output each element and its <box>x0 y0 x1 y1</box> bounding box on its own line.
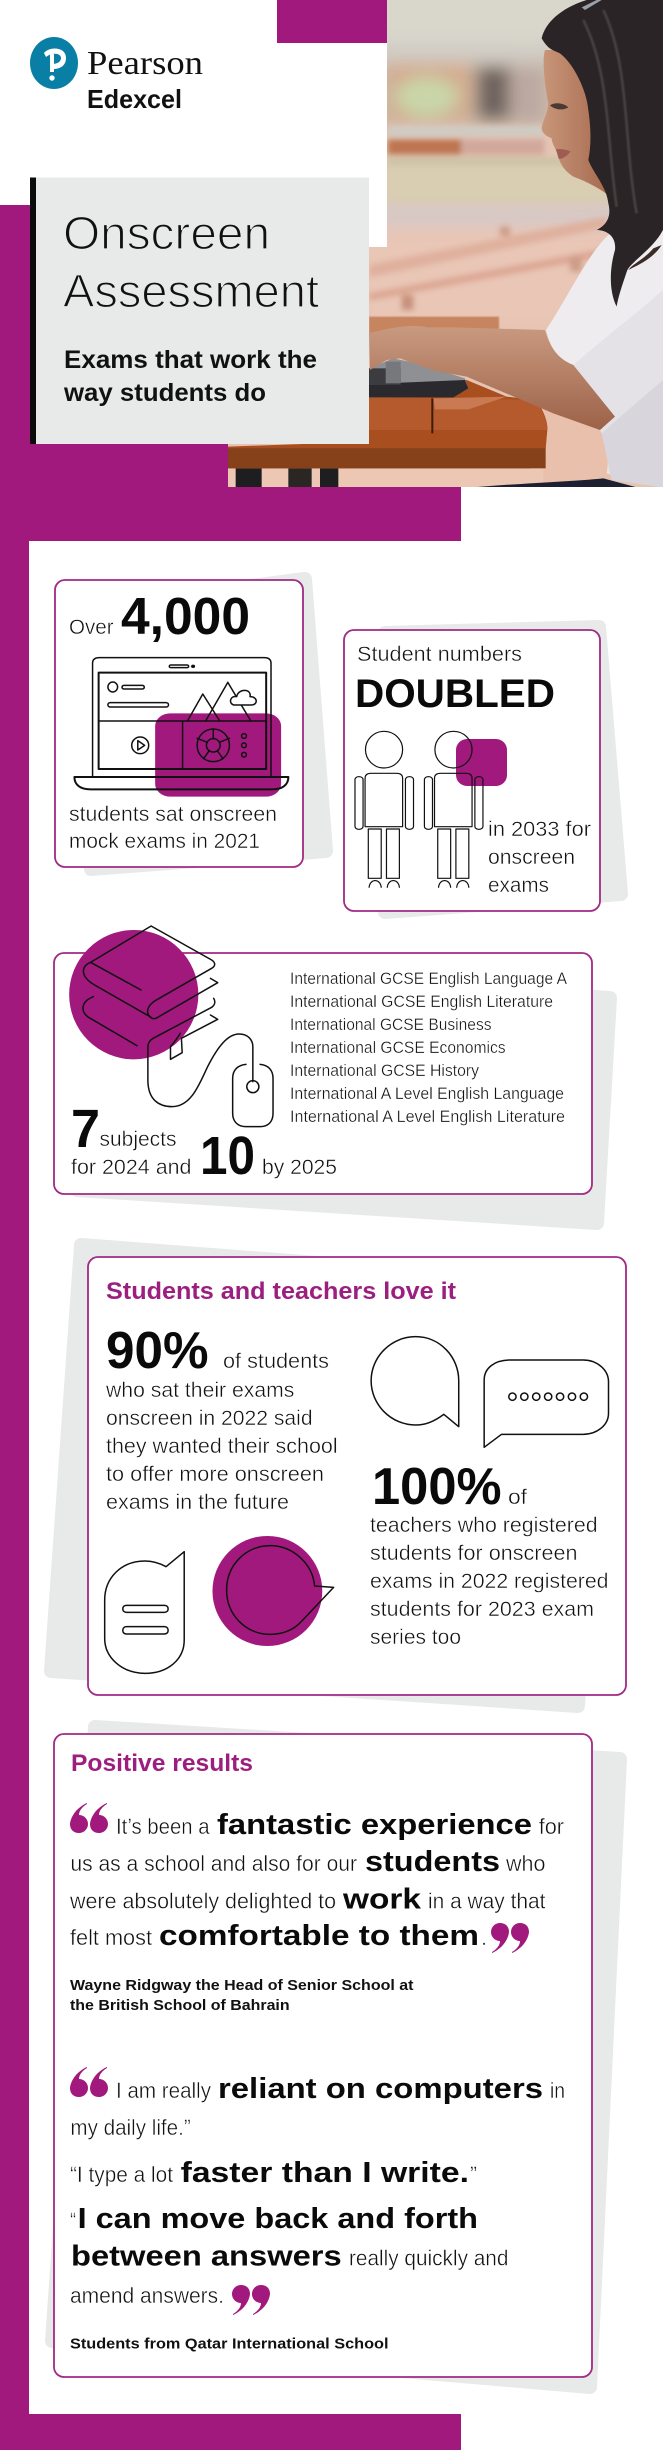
stat: 100%: teachers who registered <box>370 1514 598 1537</box>
quote: Wayne Ridgway: Wayne Ridgway the Head of Senior School at <box>70 1977 414 1994</box>
quote: Wayne Ridgway: students <box>365 1846 500 1878</box>
title: Assessment <box>63 265 319 317</box>
quote: Wayne Ridgway: work <box>342 1884 422 1916</box>
quote: Qatar students: I can move back and forth <box>78 2203 478 2235</box>
hair <box>542 0 663 307</box>
title panel <box>30 178 369 444</box>
stat: over 4,000: 4,000 <box>121 588 250 646</box>
quote: Wayne Ridgway: comfortable to them <box>159 1920 479 1952</box>
panel: students and teachers love it <box>51 1245 626 1706</box>
stat: 90%: 90% <box>106 1322 208 1380</box>
icon: laptop <box>74 658 288 797</box>
stat: 7 subjects, 10 by 2025: 7 <box>71 1099 100 1159</box>
quote: Wayne Ridgway <box>69 1803 564 2014</box>
stat: 90%: of students <box>223 1350 329 1373</box>
list of subjects: International GCSE English Literature <box>290 992 553 1011</box>
panel: subjects <box>54 926 610 1223</box>
stat: 90%: exams in the future <box>106 1491 289 1514</box>
heading: DOUBLED <box>355 672 555 716</box>
heading: Positive results <box>71 1750 253 1777</box>
stat: 7 subjects, 10 by 2025: subjects <box>100 1128 176 1151</box>
logo: Pearson Edexcel <box>30 37 203 114</box>
quote: Qatar students: amend answers. <box>70 2283 224 2308</box>
icon: books and mouse <box>69 926 273 1127</box>
stat: 7 subjects, 10 by 2025 <box>71 1099 337 1186</box>
quote: Qatar students: my daily life.” <box>70 2115 191 2140</box>
arm and hand <box>369 326 615 430</box>
quote: Wayne Ridgway: in a way that <box>428 1888 546 1914</box>
background magenta blocks <box>0 0 461 2450</box>
quote: Qatar students: reliant on computers <box>218 2073 543 2105</box>
title: Onscreen <box>63 207 270 259</box>
quote: Wayne Ridgway: us as a school and also for our <box>70 1851 357 1876</box>
icon: opening quote mark <box>70 2067 108 2097</box>
heading <box>355 643 555 716</box>
caption <box>488 818 591 897</box>
logo: Pearson Edexcel: Pearson <box>87 45 203 82</box>
shirt <box>546 217 663 487</box>
quote: Wayne Ridgway: the British School of Bahrain <box>70 1997 290 2014</box>
quote: Qatar students: in <box>550 2078 565 2103</box>
quote: Wayne Ridgway: for <box>539 1814 564 1839</box>
stat: 100%: of <box>508 1486 527 1509</box>
quote: Qatar students: really quickly and <box>349 2246 508 2270</box>
caption: students sat onscreen <box>69 803 277 826</box>
stat: 100%: students for onscreen <box>370 1542 578 1565</box>
quote: Qatar students: Students from Qatar International School <box>70 2336 388 2352</box>
list of subjects: International GCSE Economics <box>290 1038 506 1057</box>
face <box>542 50 610 197</box>
list of subjects: International GCSE Business <box>290 1015 492 1034</box>
icon: speech bubbles <box>105 1337 609 1673</box>
quote: Wayne Ridgway: . <box>481 1925 487 1950</box>
quote: Wayne Ridgway: who <box>505 1851 546 1876</box>
stat: 7 subjects, 10 by 2025: for 2024 and <box>71 1156 192 1179</box>
table <box>227 380 547 468</box>
panel: 4,000 students <box>55 579 326 869</box>
list of subjects <box>290 969 568 1126</box>
stat: 100% <box>370 1458 608 1649</box>
stat: 100%: series too <box>370 1626 461 1649</box>
quote: Wayne Ridgway: It’s been a <box>116 1814 210 1839</box>
quote: Wayne Ridgway: fantastic experience <box>217 1809 532 1841</box>
stat: 90%: onscreen in 2022 said <box>106 1407 313 1430</box>
quote: Wayne Ridgway: felt most <box>70 1925 152 1950</box>
stat: 7 subjects, 10 by 2025: by 2025 <box>262 1156 337 1179</box>
list of subjects: International GCSE History <box>290 1061 479 1080</box>
heading: Student numbers <box>357 643 522 666</box>
list of subjects: International A Level English Language <box>290 1084 564 1103</box>
list of subjects: International A Level English Literature <box>290 1107 565 1126</box>
stat: 100%: 100% <box>372 1458 502 1516</box>
laptop <box>369 359 468 391</box>
icon: two students <box>355 731 507 887</box>
trousers <box>473 478 637 487</box>
photo: student typing at laptop <box>187 0 663 488</box>
quote: Qatar students: faster than I write. <box>181 2157 469 2189</box>
icon: closing quote mark <box>232 2285 270 2315</box>
stat: 90%: they wanted their school <box>106 1435 338 1458</box>
quote: Qatar students: ” <box>470 2162 477 2187</box>
heading: Students and teachers love it <box>106 1278 456 1305</box>
quote: Qatar students: “I type a lot <box>70 2162 173 2187</box>
caption: mock exams in 2021 <box>69 830 260 853</box>
panel: student numbers doubled <box>344 627 621 912</box>
stat: 100%: exams in 2022 registered <box>370 1570 608 1593</box>
stat: over 4,000: Over <box>69 616 114 639</box>
title <box>63 207 319 317</box>
subtitle <box>63 346 317 407</box>
subtitle: way students do <box>63 379 266 407</box>
caption: in 2033 for <box>488 818 591 841</box>
list of subjects: International GCSE English Language A <box>290 969 568 988</box>
icon: closing quote mark <box>491 1923 529 1953</box>
quote: Qatar students <box>70 2067 565 2352</box>
icon: Pearson P <box>30 37 78 89</box>
panel: positive results <box>52 1727 620 2387</box>
caption: exams <box>488 874 549 897</box>
quote: Qatar students: “ <box>70 2208 76 2233</box>
quote: Qatar students: I am really <box>116 2078 211 2103</box>
subtitle: Exams that work the <box>64 346 317 374</box>
icon: opening quote mark <box>70 1803 108 1833</box>
stat: 100%: students for 2023 exam <box>370 1598 594 1621</box>
logo: Pearson Edexcel: Edexcel <box>87 84 182 114</box>
stat: 90% <box>105 1322 338 1514</box>
quote: Qatar students: between answers <box>71 2240 342 2272</box>
stat: 90%: to offer more onscreen <box>106 1463 324 1486</box>
caption: onscreen <box>488 846 575 869</box>
quote: Wayne Ridgway: were absolutely delighted to <box>69 1888 336 1914</box>
stat: 7 subjects, 10 by 2025: 10 <box>200 1126 255 1186</box>
caption <box>69 803 277 853</box>
stat: 90%: who sat their exams <box>105 1379 294 1402</box>
